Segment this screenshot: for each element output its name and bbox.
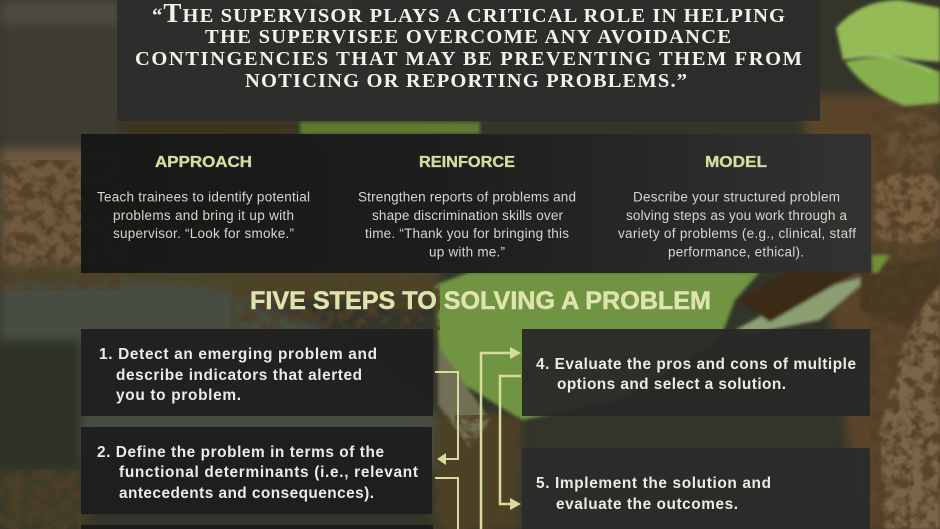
quote text: NOTICING OR REPORTING PROBLEMS.” [245, 70, 687, 92]
step 2: antecedents and consequences). [119, 485, 374, 502]
step 1: describe indicators that alerted [116, 367, 362, 384]
column: model: performance, ethical). [668, 244, 804, 260]
step 4: 4. Evaluate the pros and cons of multiple [536, 356, 856, 373]
step 4 [522, 329, 870, 416]
step 5: 5. Implement the solution and [536, 475, 771, 492]
column: model: solving steps as you work through a [626, 208, 847, 223]
column: reinforce [358, 154, 576, 260]
column: reinforce: shape discrimination skills over [372, 208, 564, 223]
arrow: step 3 to step 4 [481, 347, 521, 529]
column: model: Describe your structured problem [633, 190, 840, 204]
column: model: MODEL [705, 154, 767, 171]
seedling leaf behind the title [435, 272, 760, 420]
quote text: CONTINGENCIES THAT MAY BE PREVENTING THEM FROM [135, 48, 802, 70]
step 3 box [81, 525, 433, 529]
column: approach: APPROACH [155, 154, 252, 171]
column: approach [97, 154, 310, 241]
step 1: you to problem. [116, 387, 241, 404]
column: approach: supervisor. “Look for smoke.” [113, 226, 294, 241]
step 5: evaluate the outcomes. [556, 496, 738, 513]
column: reinforce: time. “Thank you for bringing this [365, 226, 569, 241]
step 1 [81, 329, 433, 416]
step 2 [81, 427, 432, 514]
column: model: variety of problems (e.g., clinical, staff [618, 226, 856, 241]
panel: approach, reinforce, model [81, 134, 871, 273]
step 1: 1. Detect an emerging problem and [99, 346, 377, 363]
column: approach: Teach trainees to identify potential [97, 190, 310, 204]
panel: quote [117, 0, 820, 121]
step 5 [522, 448, 870, 529]
column: model [618, 154, 856, 260]
column: approach: problems and bring it up with [113, 208, 294, 223]
column: reinforce: REINFORCE [419, 154, 515, 171]
quote text: THE SUPERVISEE OVERCOME ANY AVOIDANCE [205, 26, 731, 48]
step 2: functional determinants (i.e., relevant [119, 464, 418, 481]
title: FIVE STEPS TO SOLVING A PROBLEM [250, 287, 711, 315]
step 4: options and select a solution. [557, 376, 786, 393]
arrow: step 1 to step 2 [435, 372, 458, 465]
quote text [135, 0, 802, 92]
arrow: step 4 to step 5 [500, 376, 521, 510]
step 2: 2. Define the problem in terms of the [97, 444, 384, 461]
column: reinforce: Strengthen reports of problems and [358, 190, 576, 204]
column: reinforce: up with me.” [429, 244, 505, 260]
arrow: step 2 to step 3 [435, 478, 458, 529]
fine soil texture [0, 107, 940, 529]
